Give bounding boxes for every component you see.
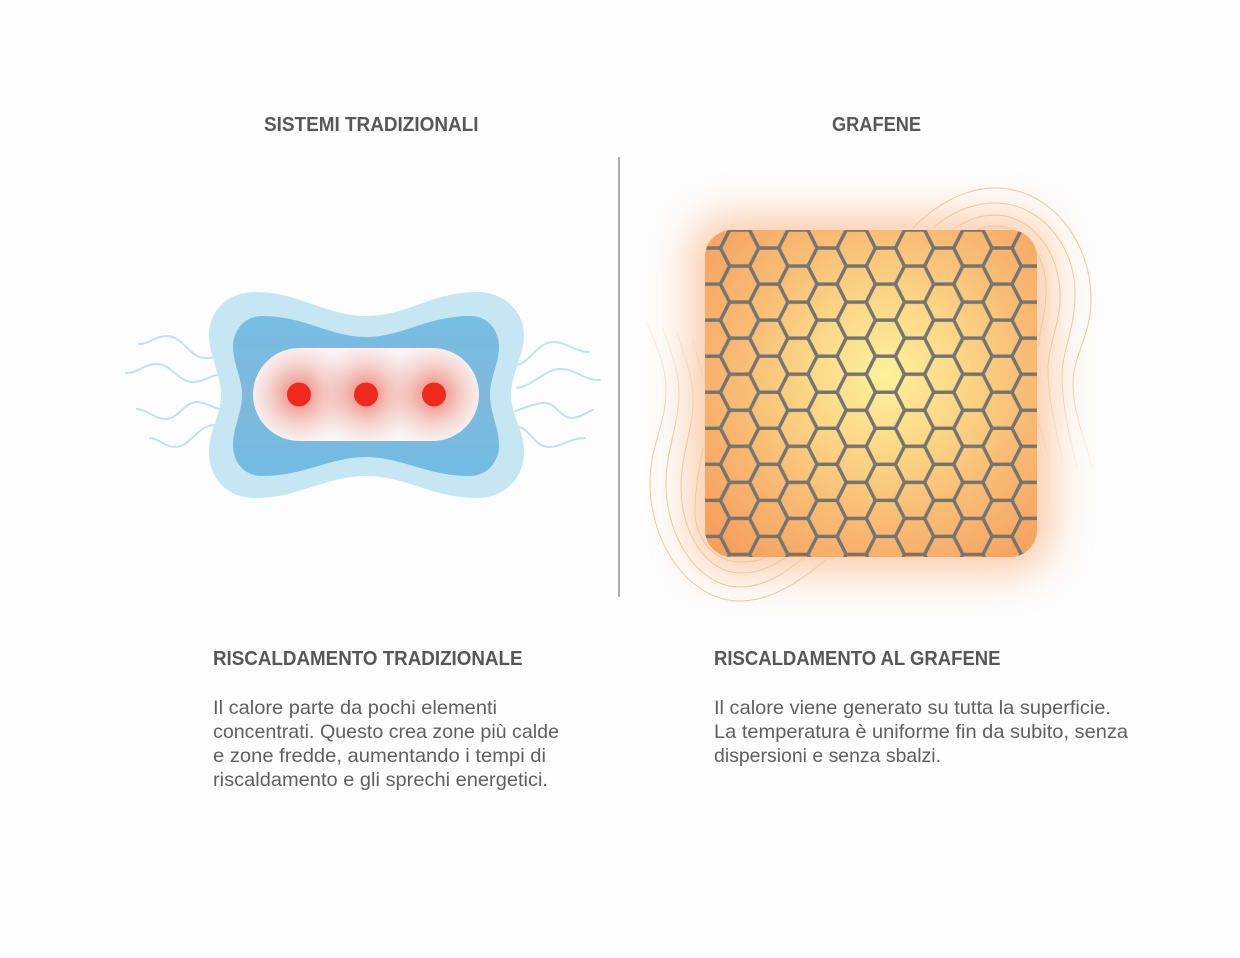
divider line <box>618 157 620 597</box>
subheading: riscaldamento al grafene: RISCALDAMENTO AL GRAFENE <box>714 648 1000 670</box>
pill heating element <box>253 348 479 441</box>
contour lines top right <box>913 188 1093 470</box>
contour lines bottom left <box>647 323 825 601</box>
traditional heater illustration <box>126 292 600 498</box>
body text traditional: e zone fredde, aumentando i tempi di <box>213 745 546 767</box>
body text traditional: concentrati. Questo crea zone più calde <box>213 721 559 743</box>
traditional text block <box>213 648 559 791</box>
body text traditional: riscaldamento e gli sprechi energetici. <box>213 769 548 791</box>
graphene heater illustration <box>647 188 1093 601</box>
body text graphene: dispersioni e senza sbalzi. <box>714 745 941 767</box>
subheading: riscaldamento tradizionale: RISCALDAMENTO TRADIZIONALE <box>213 648 522 670</box>
inner blue shape <box>233 316 499 476</box>
body text graphene <box>714 697 1128 767</box>
heat waves right <box>515 342 600 447</box>
red heat points <box>287 382 446 406</box>
heat waves left <box>126 336 219 447</box>
body text graphene: Il calore viene generato su tutta la superficie. <box>714 697 1111 719</box>
outer pale blue shape <box>209 292 524 498</box>
heading: sistemi tradizionali: SISTEMI TRADIZIONALI <box>264 114 478 136</box>
graphene panel <box>705 230 1037 557</box>
graphene text block <box>714 648 1128 767</box>
body text traditional <box>213 697 559 791</box>
orange glow <box>692 218 1050 570</box>
body text traditional: Il calore parte da pochi elementi <box>213 697 497 719</box>
hexagonal lattice <box>705 230 1037 557</box>
heading: grafene: GRAFENE <box>832 114 921 136</box>
body text graphene: La temperatura è uniforme fin da subito, senza <box>714 721 1128 743</box>
